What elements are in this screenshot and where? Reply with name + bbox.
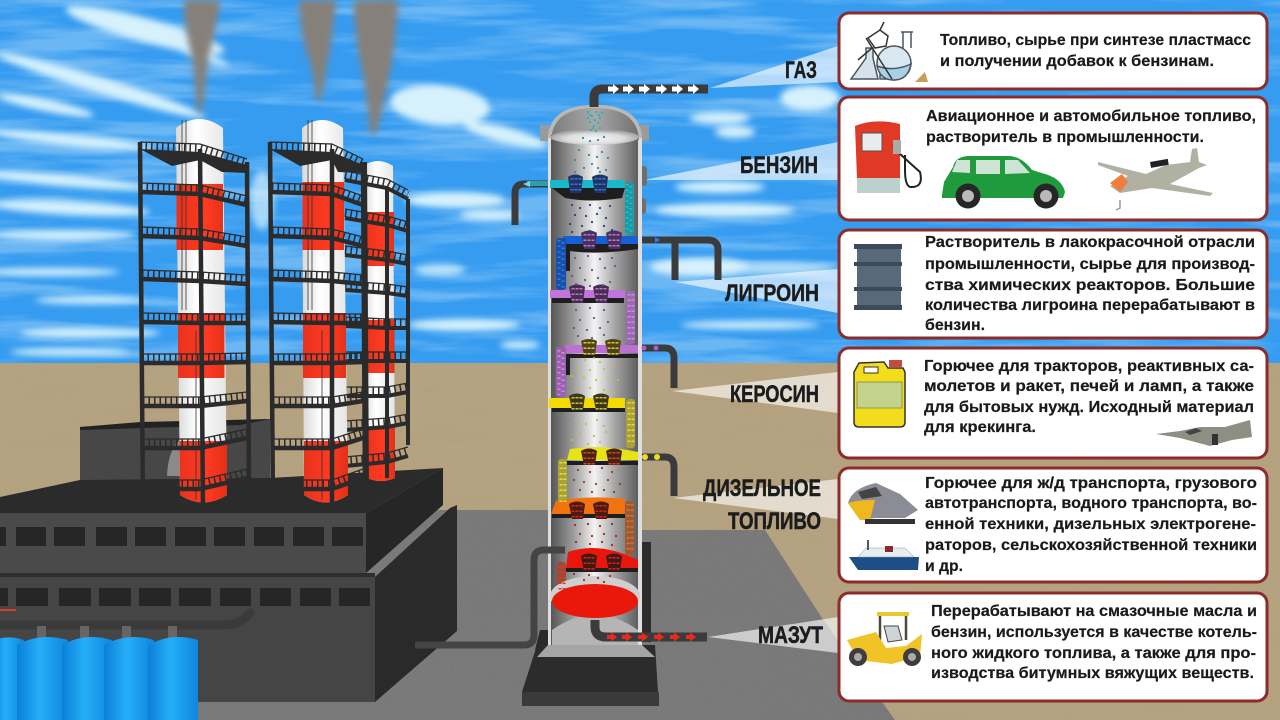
tray dishes (552, 188, 638, 572)
icon: green car (942, 156, 1065, 208)
mazut outlet pipe (595, 620, 707, 642)
label: БЕНЗИН: БЕНЗИН (740, 152, 818, 179)
distillation column base (522, 542, 659, 706)
panel: diesel: енной техники, дизельных электрогене- (925, 516, 1256, 533)
curved pipe at tower base (167, 440, 180, 476)
panel: diesel: автотранспорта, водного транспорта, во- (925, 495, 1257, 512)
panel: gasoline: растворитель в промышленности. (926, 129, 1204, 146)
tray 4: light violet fraction (556, 339, 638, 397)
panel: fuel oil: Перерабатывают на смазочные масла и (931, 603, 1257, 620)
panel: kerosene: молетов и ракет, печей и ламп, а также (924, 378, 1254, 395)
panel: diesel (839, 468, 1267, 582)
background: sky (0, 0, 1280, 366)
label: МАЗУТ: МАЗУТ (758, 622, 823, 649)
panel: gas: Топливо, сырье при синтезе пластмасс (940, 32, 1251, 49)
white flow arrows (608, 84, 699, 94)
panel: naphtha (839, 230, 1267, 338)
back block building (80, 419, 270, 483)
callout beams (643, 46, 838, 653)
icon: barrel (854, 244, 902, 310)
label: ДИЗЕЛЬНОЕ ТОПЛИВО: ТОПЛИВО (728, 508, 821, 535)
panel: naphtha: Растворитель в лакокрасочной отрасли (925, 234, 1255, 251)
flanges and side nozzles (540, 125, 649, 214)
falling droplets (570, 112, 620, 582)
label: ДИЗЕЛЬНОЕ ТОПЛИВО (703, 475, 821, 535)
tray 8: red fraction (557, 548, 638, 592)
distillation column (540, 105, 649, 645)
tray 6: lemon fraction (558, 447, 638, 505)
panel: gasoline (839, 97, 1267, 220)
background: gravel ground (198, 508, 895, 720)
panel: naphtha: ства химических реакторов. Большие (925, 277, 1255, 294)
icon: train (848, 483, 918, 524)
tower 1 (140, 119, 249, 511)
icon: fuel pump (855, 121, 921, 193)
column body cut-away (548, 105, 642, 645)
lower windows (0, 588, 370, 606)
lower side face (375, 505, 457, 702)
panel: gasoline: Авиационное и автомобильное топливо, (926, 108, 1256, 125)
tray 5: yellow fraction (549, 394, 635, 448)
icon: jet fighter (1156, 420, 1252, 446)
panel: diesel: Горючее для ж/д транспорта, грузового (925, 475, 1257, 492)
panel: naphtha: промышленности, сырье для производ- (925, 256, 1255, 273)
icon: yellow canister (854, 360, 905, 427)
panel: fuel oil: бензин, используется в качестве котель- (931, 624, 1257, 641)
panel: fuel oil: ного жидкого топлива, а также для про- (931, 645, 1256, 662)
upper side face (366, 468, 443, 573)
upper deck top (0, 468, 443, 513)
building: plant base (0, 468, 457, 702)
label: ДИЗЕЛЬНОЕ ТОПЛИВО: ДИЗЕЛЬНОЕ (703, 475, 821, 502)
tray 2: blue fraction (556, 230, 638, 290)
residue pool (550, 576, 640, 618)
dome interior (551, 108, 639, 143)
panel: gas (839, 13, 1267, 89)
label: ЛИГРОИН: ЛИГРОИН (725, 280, 819, 307)
panel: kerosene: для бытовых нужд. Исходный материал (924, 399, 1254, 416)
panel: fuel oil: изводства битумных вяжущих веществ. (931, 665, 1254, 682)
upper front face (0, 513, 366, 573)
outlet pipes (415, 184, 718, 645)
panel: kerosene: Горючее для тракторов, реактивных са- (924, 358, 1254, 375)
dense droplets in downcomers and caps (559, 178, 633, 590)
dome lower ellipse (552, 615, 638, 645)
panel: fuel oil (839, 593, 1267, 701)
label: ГАЗ: ГАЗ (785, 57, 817, 84)
background: desert sand (0, 363, 1280, 720)
outlet flow markers (523, 181, 660, 460)
tray 7: orange fraction (551, 497, 634, 555)
panel: naphtha: количества лигроина перерабатывают в (925, 297, 1255, 314)
feed pipe from plant to column (0, 613, 250, 625)
gas outlet pipe (594, 84, 708, 107)
panel: naphtha: бензин. (925, 317, 985, 334)
panel: kerosene (839, 348, 1267, 458)
lower front face (0, 577, 375, 702)
panel: gas: и получении добавок к бензинам. (940, 53, 1214, 70)
tower 3 (rear) (345, 161, 408, 492)
icon: ship (849, 540, 919, 570)
tower 2 (270, 120, 365, 511)
tray 3: violet fraction (550, 284, 635, 344)
red flow markers (607, 632, 696, 642)
panel: kerosene: для крекинга. (924, 419, 1036, 436)
blue storage tanks (0, 626, 198, 720)
tray 1: cyan fraction (527, 174, 634, 235)
panel: diesel: раторов, сельскохозяйственной техники (925, 537, 1257, 554)
label: КЕРОСИН: КЕРОСИН (730, 381, 819, 408)
smoke plumes (184, 0, 398, 134)
icon: flasks and molecule (851, 22, 928, 82)
upper windows (0, 527, 363, 546)
icon: road roller (847, 612, 922, 666)
icon: airplane (1098, 148, 1213, 210)
panel: diesel: и др. (925, 558, 963, 575)
